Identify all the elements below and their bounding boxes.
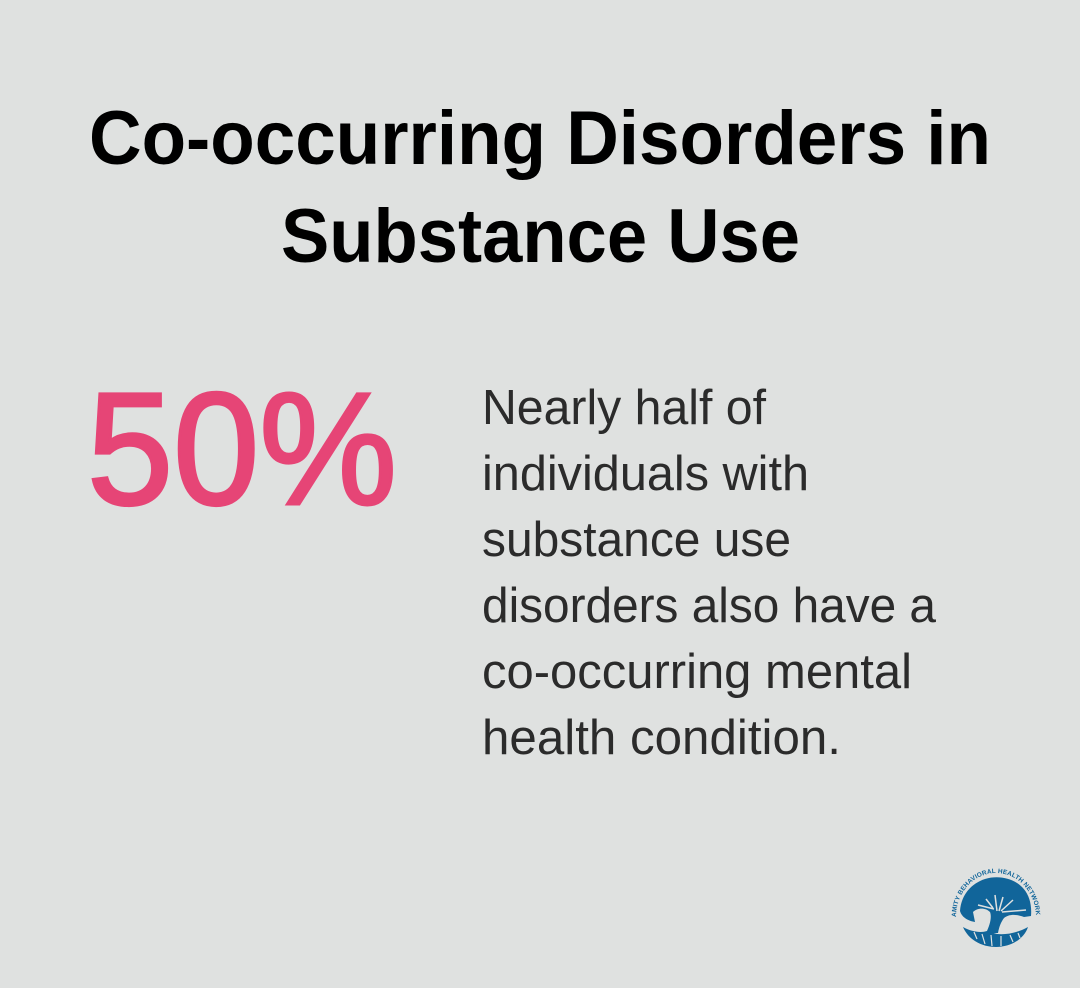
description text: health condition. [482,711,841,765]
description text [482,381,937,765]
icon: Amity Behavioral Health Network logo: AMITY BEHAVIORAL HEALTH NETWORK [952,868,1040,917]
description text: disorders also have a [482,579,937,633]
title: Substance Use [281,194,800,279]
title [89,96,991,279]
description text: co-occurring mental [482,645,912,699]
title: Co-occurring Disorders in [89,96,991,181]
description text: substance use [482,513,791,567]
icon: Amity Behavioral Health Network logo [952,868,1040,947]
description text: individuals with [482,447,809,501]
statistic: 50%: 50% [87,359,397,538]
description text: Nearly half of [482,381,766,435]
